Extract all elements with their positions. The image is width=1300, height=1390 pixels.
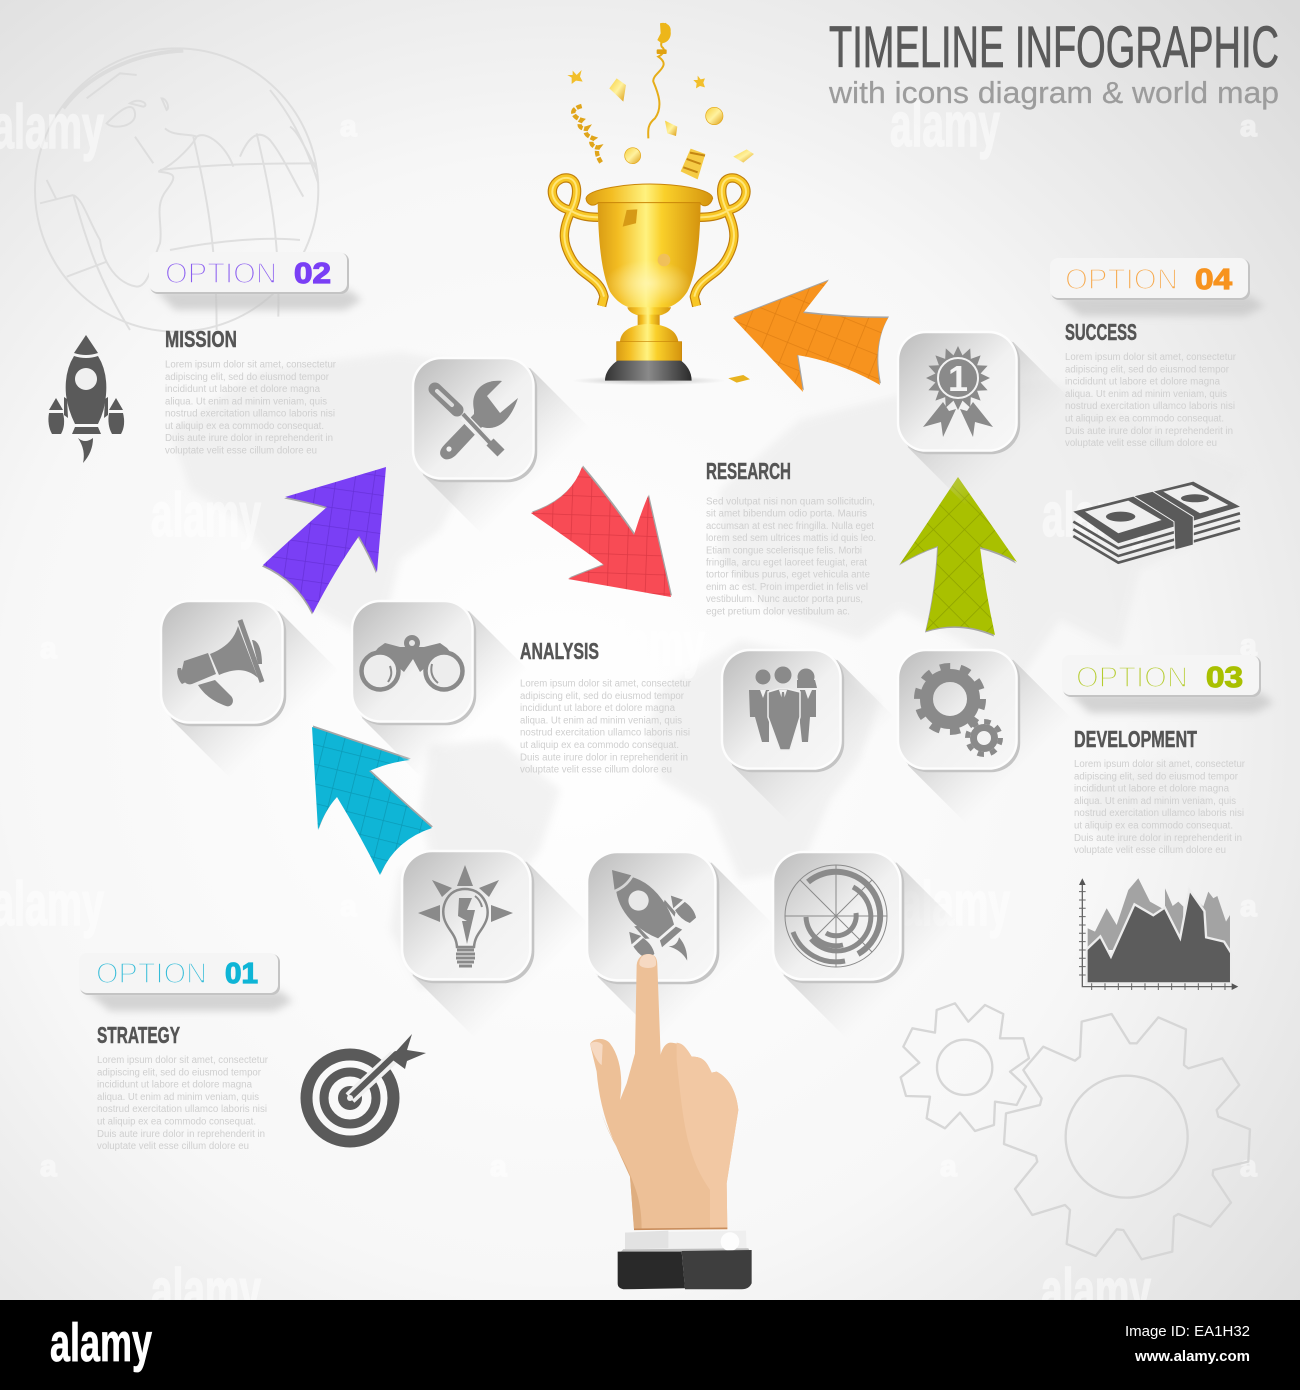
text block: strategy: adipiscing elit, sed do eiusmod tempor: [97, 1067, 262, 1078]
watermarks: a: [1240, 629, 1257, 662]
text block: strategy: STRATEGY: [97, 1022, 180, 1048]
cup: [598, 202, 701, 308]
text block: analysis: incididunt ut labore et dolore magna: [520, 703, 675, 714]
watermarks: a: [490, 632, 507, 665]
bottom branding bar: Image ID: EA1H32: [1125, 1323, 1250, 1340]
text block: research: eget pretium dolor vestibulum ac.: [706, 606, 850, 617]
tile: people: [721, 649, 897, 825]
text block: strategy: incididunt ut labore et dolore magna: [97, 1080, 252, 1091]
text block: analysis: nostrud exercitation ullamco laboris nisi: [520, 728, 690, 739]
watermarks: a: [1240, 890, 1257, 923]
arrow: green: [899, 477, 1017, 636]
tile: rocket: [586, 847, 777, 1042]
watermarks: a: [340, 890, 357, 923]
text block: analysis: [520, 638, 692, 776]
watermarks: a: [940, 1150, 957, 1183]
option 03 label: OPTION: [1076, 662, 1188, 694]
stem and base: [627, 307, 671, 315]
outlined gears: [901, 1003, 1250, 1259]
text block: strategy: nostrud exercitation ullamco laboris nisi: [97, 1104, 267, 1115]
option 04 label: OPTION: [1065, 264, 1178, 296]
title: with icons diagram & world map: [828, 75, 1279, 110]
confetti: [567, 23, 754, 383]
text block: mission: Duis aute irure dolor in reprehenderit in: [165, 433, 333, 444]
text block: development: adipiscing elit, sed do eiusmod tempor: [1074, 771, 1239, 782]
text block: success: SUCCESS: [1065, 319, 1137, 345]
text block: strategy: Lorem ipsum dolor sit amet, consectetur: [97, 1055, 269, 1066]
text block: success: aliqua. Ut enim ad minim veniam, quis: [1065, 389, 1227, 400]
tile: medal: [897, 331, 1073, 507]
text block: strategy: [97, 1022, 269, 1152]
icon: stack of cash: [1073, 482, 1240, 563]
watermarks: a: [1240, 110, 1257, 143]
text block: research: [706, 458, 876, 617]
text block: mission: incididunt ut labore et dolore magna: [165, 384, 320, 395]
text block: strategy: voluptate velit esse cillum dolore eu: [97, 1141, 249, 1152]
text block: analysis: voluptate velit esse cillum dolore eu: [520, 765, 672, 776]
text block: development: incididunt ut labore et dolore magna: [1074, 784, 1229, 795]
bottom branding bar: [0, 1300, 1300, 1390]
text block: analysis: ANALYSIS: [520, 638, 599, 664]
tile: light bulb: [401, 850, 592, 1041]
tile: tools: [412, 357, 591, 536]
option 01 label: 01: [225, 958, 258, 990]
watermarks: a: [40, 1150, 57, 1183]
tile: radar: [772, 851, 962, 1040]
watermarks: alamy: [890, 91, 1000, 160]
text block: research: Sed volutpat nisi non quam sollicitudin,: [706, 496, 875, 508]
text block: analysis: Lorem ipsum dolor sit amet, consectetur: [520, 678, 692, 690]
text block: success: Lorem ipsum dolor sit amet, consectetur: [1065, 352, 1237, 363]
text block: development: DEVELOPMENT: [1074, 726, 1197, 752]
text block: research: fringilla, arcu eget laoreet feugiat, erat: [706, 558, 867, 568]
option 03 label: [1062, 655, 1274, 713]
tile: medal: 1: [948, 358, 968, 399]
option 04 label: [1050, 258, 1265, 316]
text block: success: Duis aute irure dolor in reprehenderit in: [1065, 426, 1233, 437]
option 02 label: OPTION: [165, 258, 277, 290]
arrow: orange: [733, 280, 889, 392]
watermarks: alamy: [151, 481, 261, 550]
watermarks: a: [1240, 1150, 1257, 1183]
world map backdrop: [170, 352, 1250, 990]
right handle: [694, 178, 746, 306]
watermarks: alamy: [900, 870, 1010, 939]
bottom branding bar: alamy: [50, 1313, 152, 1373]
text block: success: adipiscing elit, sed do eiusmod tempor: [1065, 364, 1230, 375]
text block: success: [1065, 319, 1237, 449]
icon: mission rocket: [48, 335, 124, 463]
watermarks: a: [490, 1150, 507, 1183]
text block: development: voluptate velit esse cillum dolore eu: [1074, 845, 1226, 856]
text block: mission: MISSION: [165, 326, 237, 352]
text block: development: ut aliquip ex ea commodo consequat.: [1074, 820, 1233, 832]
watermarks: alamy: [151, 1257, 261, 1326]
text block: mission: aliqua. Ut enim ad minim veniam, quis: [165, 396, 327, 408]
option 01 label: OPTION: [96, 958, 207, 990]
tile: binoculars: [351, 600, 530, 779]
text block: development: Duis aute irure dolor in reprehenderit in: [1074, 833, 1242, 844]
text block: mission: adipiscing elit, sed do eiusmod tempor: [165, 372, 330, 383]
text block: research: enim ac est. Proin imperdiet in felis vel: [706, 582, 868, 593]
text block: analysis: adipiscing elit, sed do eiusmod tempor: [520, 691, 685, 702]
watermarks: alamy: [595, 610, 705, 679]
text block: mission: [165, 326, 337, 456]
arrow: purple: [262, 467, 386, 614]
arrow: red: [531, 466, 672, 597]
text block: research: Etiam congue scelerisque felis. Morbi: [706, 545, 862, 556]
watermarks: alamy: [1041, 1257, 1151, 1326]
text block: research: sit amet bibendum odio porta. Mauris: [706, 509, 867, 520]
tile: megaphone: [160, 600, 341, 781]
arrow: blue: [312, 726, 433, 875]
title: [828, 15, 1279, 110]
option 01 label: [79, 953, 293, 1011]
tile: gears: [897, 649, 1073, 825]
text block: analysis: ut aliquip ex ea commodo consequat.: [520, 740, 679, 751]
text block: research: accumsan at est nec fringilla. Nulla eget: [706, 521, 874, 532]
text block: analysis: Duis aute irure dolor in reprehenderit in: [520, 752, 688, 763]
text block: strategy: Duis aute irure dolor in reprehenderit in: [97, 1129, 265, 1140]
text block: analysis: aliqua. Ut enim ad minim veniam, quis: [520, 715, 682, 726]
trophy with confetti: [552, 23, 754, 385]
icon: area chart: [1079, 878, 1238, 990]
text block: success: incididunt ut labore et dolore magna: [1065, 377, 1220, 388]
text block: success: ut aliquip ex ea commodo consequat.: [1065, 414, 1224, 424]
text block: mission: nostrud exercitation ullamco laboris nisi: [165, 408, 335, 420]
option 02 label: 02: [294, 258, 331, 290]
bottom branding bar: www.alamy.com: [1134, 1348, 1250, 1365]
pointing hand: [590, 954, 752, 1289]
text block: development: Lorem ipsum dolor sit amet, consectetur: [1074, 759, 1246, 770]
text block: success: nostrud exercitation ullamco laboris nisi: [1065, 401, 1235, 412]
text block: development: nostrud exercitation ullamco laboris nisi: [1074, 808, 1244, 819]
text block: development: aliqua. Ut enim ad minim veniam, quis: [1074, 796, 1236, 807]
text block: mission: ut aliquip ex ea commodo consequat.: [165, 421, 324, 432]
text block: research: vestibulum. Nunc auctor porta purus,: [706, 594, 863, 605]
text block: strategy: aliqua. Ut enim ad minim veniam, quis: [97, 1092, 259, 1103]
option 03 label: 03: [1206, 662, 1243, 694]
text block: strategy: ut aliquip ex ea commodo consequat.: [97, 1116, 256, 1128]
text block: success: voluptate velit esse cillum dolore eu: [1065, 438, 1217, 449]
option 02 label: [149, 252, 362, 310]
text block: mission: voluptate velit esse cillum dolore eu: [165, 446, 317, 456]
text block: research: RESEARCH: [706, 458, 791, 484]
option 04 label: 04: [1195, 264, 1232, 296]
text block: development: [1074, 726, 1246, 856]
watermarks: alamy: [1042, 481, 1152, 550]
text block: mission: Lorem ipsum dolor sit amet, consectetur: [165, 360, 337, 370]
watermarks: a: [340, 110, 357, 143]
left handle: [552, 178, 604, 306]
watermarks: a: [40, 632, 57, 665]
text block: research: tortor finibus purus, eget vehicula ante: [706, 570, 870, 581]
text block: research: lorem sed sem ultrices mattis id quis leo.: [706, 533, 876, 544]
icon: target with arrow: [306, 1034, 426, 1142]
globe line drawing: [35, 48, 318, 332]
